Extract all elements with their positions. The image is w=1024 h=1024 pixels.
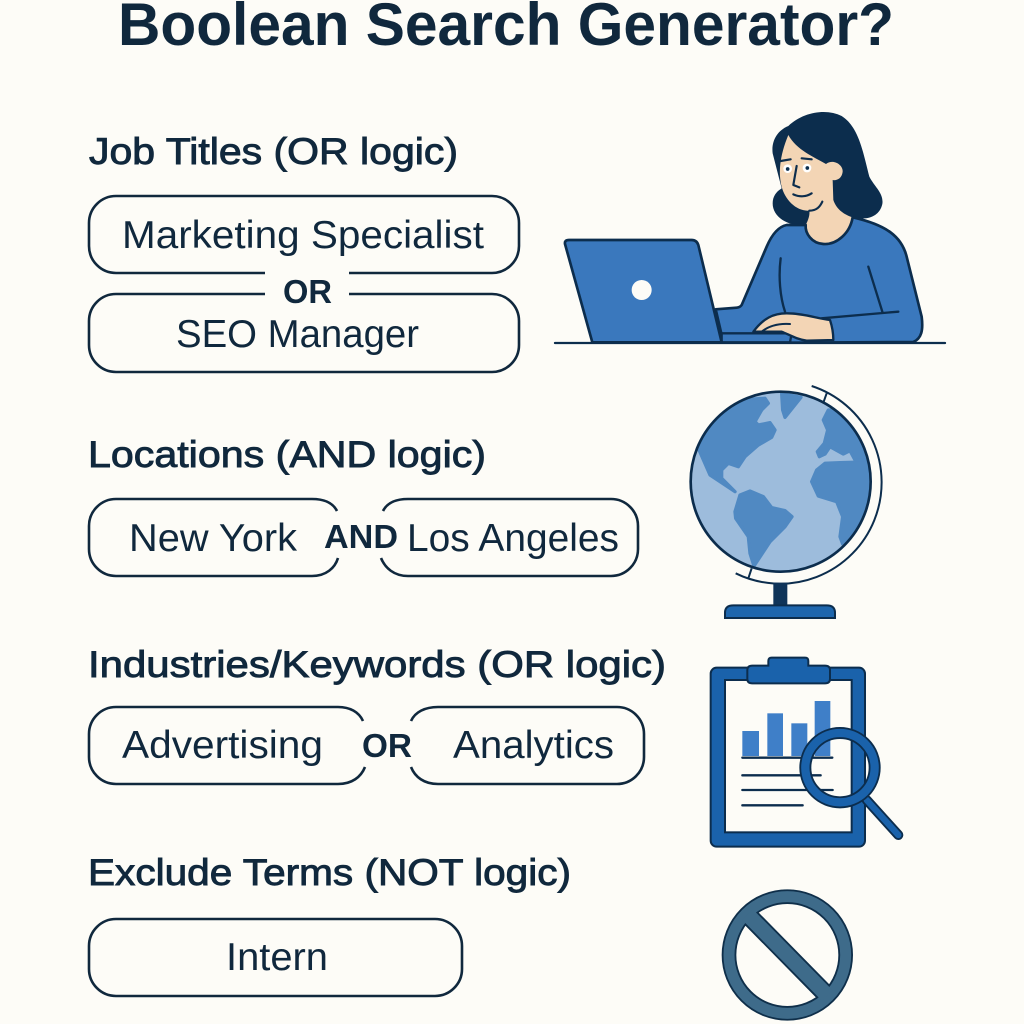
heading: job titles: Job Titles (OR logic) — [89, 131, 458, 172]
pill: los angeles — [381, 499, 638, 576]
heading: exclude terms: Exclude Terms (NOT logic) — [88, 852, 571, 893]
pill: seo manager — [89, 294, 519, 372]
pill: analytics — [411, 707, 644, 784]
pill: analytics: Analytics — [453, 724, 614, 767]
heading: industries: Industries/Keywords (OR logic) — [88, 644, 666, 685]
pill: advertising: Advertising — [122, 724, 323, 767]
panel: industry options — [89, 707, 644, 784]
operator: AND: AND — [324, 518, 398, 555]
icon: woman at laptop — [555, 112, 945, 343]
pill: marketing specialist — [89, 196, 519, 273]
operator: OR: OR — [283, 273, 332, 310]
pill: intern — [89, 919, 462, 996]
pill: marketing specialist: Marketing Specialist — [122, 214, 484, 257]
heading: locations: Locations (AND logic) — [88, 434, 486, 475]
operator: OR: OR — [362, 727, 412, 764]
icon: clipboard with magnifier — [711, 658, 898, 847]
pill: advertising — [89, 707, 365, 784]
icon: prohibition sign — [729, 897, 846, 1013]
pill: los angeles: Los Angeles — [407, 517, 619, 560]
pill: seo manager: SEO Manager — [176, 313, 419, 356]
pill: intern: Intern — [226, 936, 328, 979]
panel: location options — [89, 499, 638, 576]
pill: new york: New York — [129, 517, 298, 560]
icon: globe — [691, 386, 882, 618]
pill: new york — [89, 499, 338, 576]
panel: job title options — [89, 196, 519, 372]
